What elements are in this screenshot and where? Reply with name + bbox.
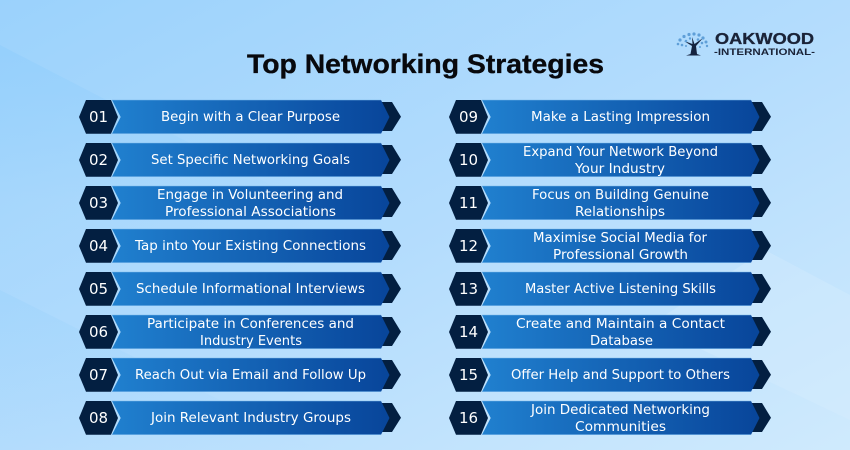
- item 15: 15: [459, 366, 478, 384]
- item 10: Expand Your Network Beyond: [523, 145, 718, 160]
- item 03: 03: [89, 194, 108, 212]
- item 16: 16: [459, 409, 478, 427]
- item 06: Participate in Conferences and: [147, 317, 354, 332]
- item 09: [449, 100, 771, 134]
- title: Top Networking Strategies: [247, 49, 604, 79]
- item 02: [79, 143, 401, 177]
- item 11: 11: [459, 194, 478, 212]
- item 12: Maximise Social Media for: [533, 231, 708, 246]
- item 07: 07: [89, 366, 108, 384]
- item 08: Join Relevant Industry Groups: [150, 411, 351, 426]
- wordmark: OAKWOOD: [715, 31, 814, 48]
- item 06: 06: [89, 323, 108, 341]
- item 13: [449, 272, 771, 306]
- item 09: Make a Lasting Impression: [531, 110, 710, 125]
- tagline: -INTERNATIONAL-: [714, 47, 815, 58]
- item 14: Database: [590, 334, 653, 349]
- item 14: Create and Maintain a Contact: [516, 317, 725, 332]
- item 10: 10: [459, 151, 478, 169]
- item 02: 02: [89, 151, 108, 169]
- item 08: [79, 401, 401, 435]
- item 05: [79, 272, 401, 306]
- item 07: [79, 358, 401, 392]
- icon: oak tree: [677, 32, 708, 56]
- item 06: Industry Events: [200, 334, 302, 349]
- item 12: 12: [459, 237, 478, 255]
- item 04: Tap into Your Existing Connections: [134, 239, 366, 254]
- item 10: Your Industry: [574, 162, 665, 177]
- item 05: 05: [89, 280, 108, 298]
- item 04: 04: [89, 237, 108, 255]
- item 03: [79, 186, 401, 220]
- item 02: Set Specific Networking Goals: [151, 153, 350, 168]
- logo: Oakwood International: [677, 31, 815, 58]
- item 08: 08: [89, 409, 108, 427]
- item 13: 13: [459, 280, 478, 298]
- item 07: Reach Out via Email and Follow Up: [135, 368, 366, 383]
- item 11: [449, 186, 771, 220]
- item 14: 14: [459, 323, 478, 341]
- item 11: Relationships: [575, 205, 665, 220]
- item 12: Professional Growth: [553, 248, 688, 263]
- item 16: Communities: [575, 420, 666, 435]
- item 11: Focus on Building Genuine: [532, 188, 709, 203]
- item 15: [449, 358, 771, 392]
- item 01: [79, 100, 401, 134]
- item 14: [449, 315, 771, 349]
- item 15: Offer Help and Support to Others: [511, 368, 730, 383]
- item 16: [449, 401, 771, 435]
- item 03: Professional Associations: [165, 205, 336, 220]
- item 12: [449, 229, 771, 263]
- item 01: Begin with a Clear Purpose: [161, 110, 340, 125]
- item 10: [449, 143, 771, 177]
- item 13: Master Active Listening Skills: [525, 282, 716, 297]
- item 03: Engage in Volunteering and: [157, 188, 343, 203]
- item 09: 09: [459, 108, 478, 126]
- item 05: Schedule Informational Interviews: [136, 282, 365, 297]
- item 16: Join Dedicated Networking: [530, 403, 710, 418]
- item 01: 01: [89, 108, 108, 126]
- item 04: [79, 229, 401, 263]
- item 06: [79, 315, 401, 349]
